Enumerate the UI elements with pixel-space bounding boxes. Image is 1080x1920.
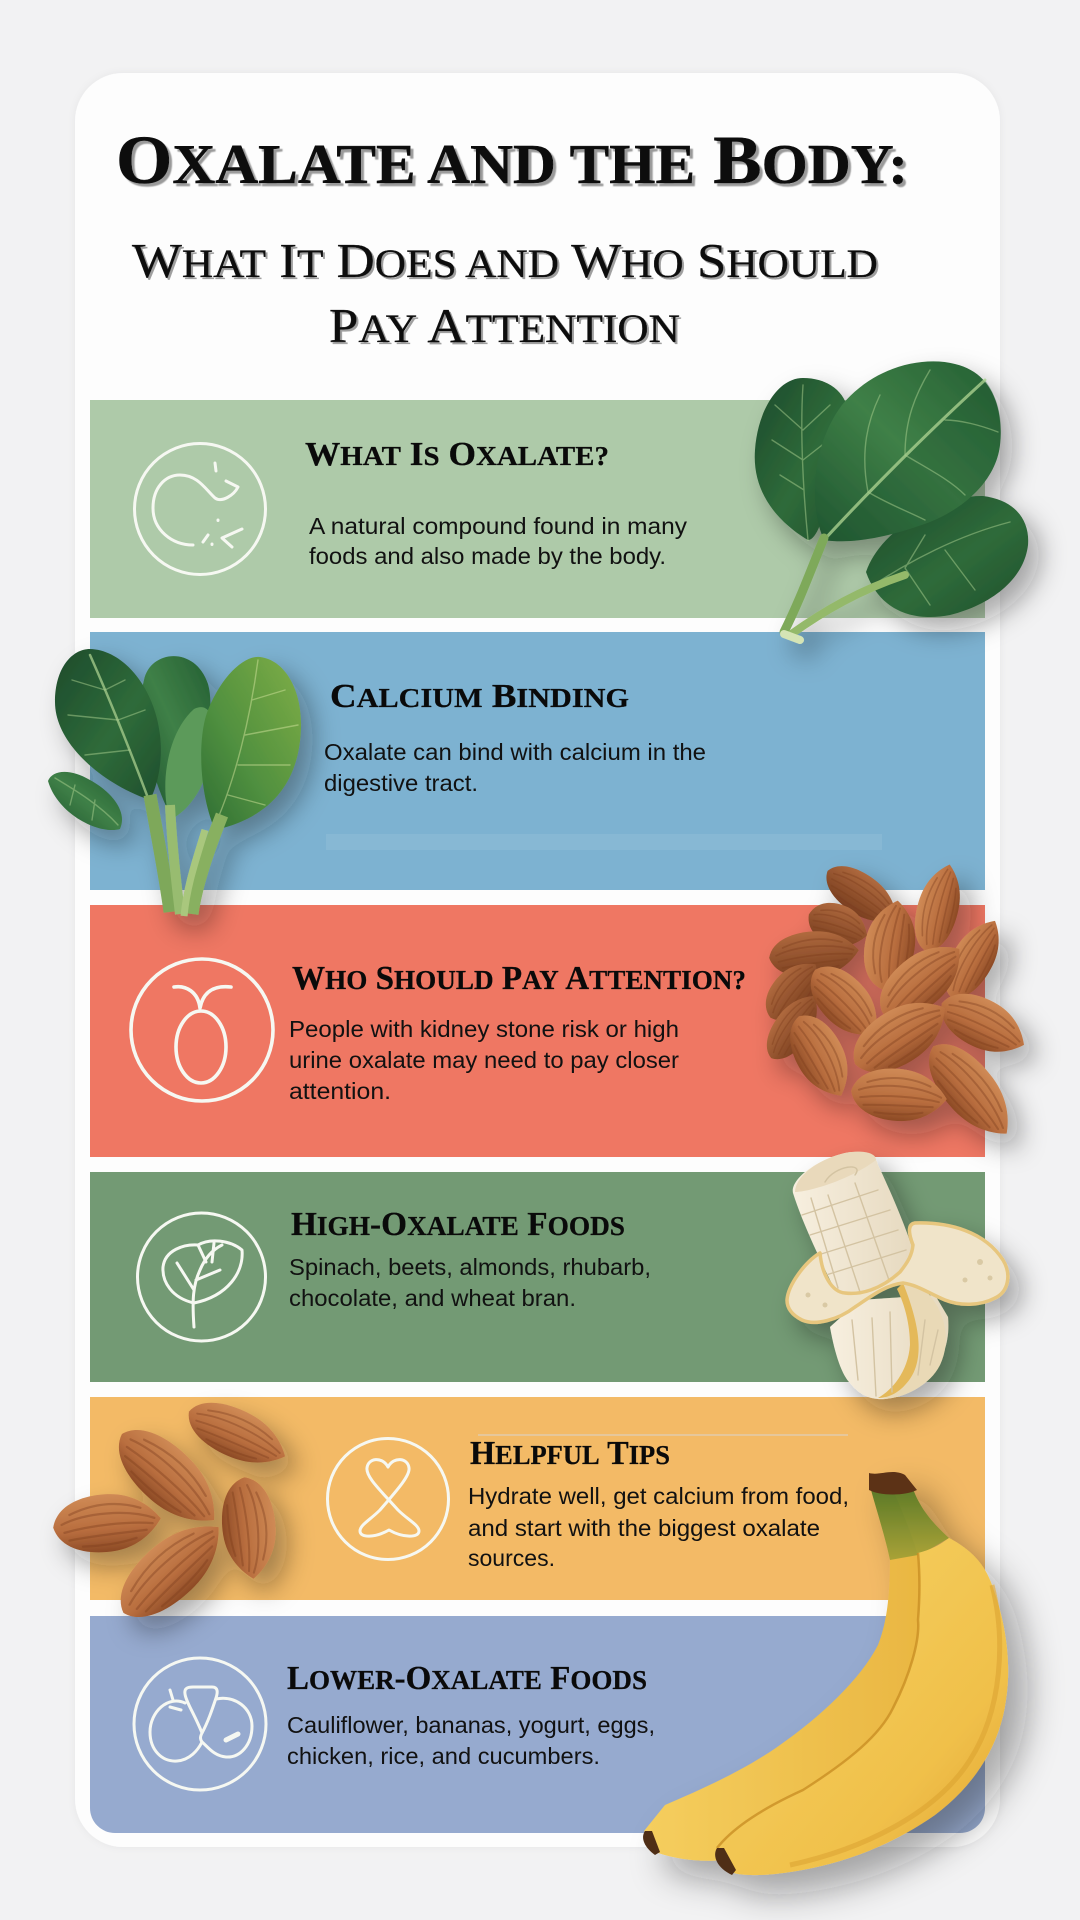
body text [287, 1712, 655, 1769]
body text: Hydrate well, get calcium from food, [468, 1483, 849, 1509]
subtitle: WHAT IT DOES AND WHO SHOULD [132, 233, 878, 288]
panel: helpful tips [90, 1397, 985, 1600]
body text: and start with the biggest oxalate [468, 1515, 820, 1541]
body text: digestive tract. [324, 770, 478, 796]
body text: Oxalate can bind with calcium in the [324, 739, 706, 765]
body text [468, 1483, 849, 1571]
body text: People with kidney stone risk or high [289, 1016, 679, 1042]
icon: oxalate molecule [134, 444, 266, 574]
icon: bananas [643, 1472, 1008, 1875]
body text: urine oxalate may need to pay closer [289, 1047, 679, 1073]
body text [324, 739, 706, 796]
icon: almond pile [755, 855, 1035, 1150]
heading: CALCIUM BINDING [330, 678, 629, 715]
panel: what is oxalate [90, 400, 985, 618]
heading: LOWER-OXALATE FOODS [287, 1660, 647, 1697]
title: OXALATE AND THE BODY: [116, 122, 908, 198]
panel: high-oxalate foods [90, 1172, 985, 1382]
body text [289, 1254, 651, 1311]
faded strip [326, 834, 882, 850]
faint line [478, 1434, 848, 1436]
body text: foods and also made by the body. [309, 543, 666, 569]
white card panel [75, 73, 1000, 1847]
icon: peeled banana [787, 1152, 1008, 1399]
body text [309, 513, 687, 569]
panel: calcium binding [90, 632, 985, 890]
panel: lower-oxalate foods [90, 1616, 985, 1833]
heading: WHAT IS OXALATE? [305, 436, 609, 473]
subtitle [132, 233, 878, 353]
heading: HIGH-OXALATE FOODS [291, 1206, 625, 1243]
body text: Cauliflower, bananas, yogurt, eggs, [287, 1712, 655, 1738]
body text: chocolate, and wheat bran. [289, 1285, 576, 1311]
banana crease [717, 1553, 920, 1848]
icon: kidney bladder [131, 959, 273, 1101]
body text [289, 1016, 679, 1104]
icon: spinach leaves top right [755, 361, 1028, 640]
body text: Spinach, beets, almonds, rhubarb, [289, 1254, 651, 1280]
heading: HELPFUL TIPS [470, 1435, 670, 1472]
subtitle: PAY ATTENTION [329, 298, 680, 353]
body text: sources. [468, 1545, 555, 1571]
icon: ribbon heart [328, 1438, 448, 1560]
body text: A natural compound found in many [309, 513, 687, 539]
icon: fruit [134, 1658, 266, 1790]
panel: who should pay attention [90, 905, 985, 1157]
heading: WHO SHOULD PAY ATTENTION? [292, 960, 746, 997]
icon: spinach bunch left [48, 649, 301, 916]
body text: chicken, rice, and cucumbers. [287, 1743, 600, 1769]
icon: almonds left [51, 1390, 295, 1634]
icon: leaf [138, 1213, 266, 1341]
body text: attention. [289, 1078, 391, 1104]
